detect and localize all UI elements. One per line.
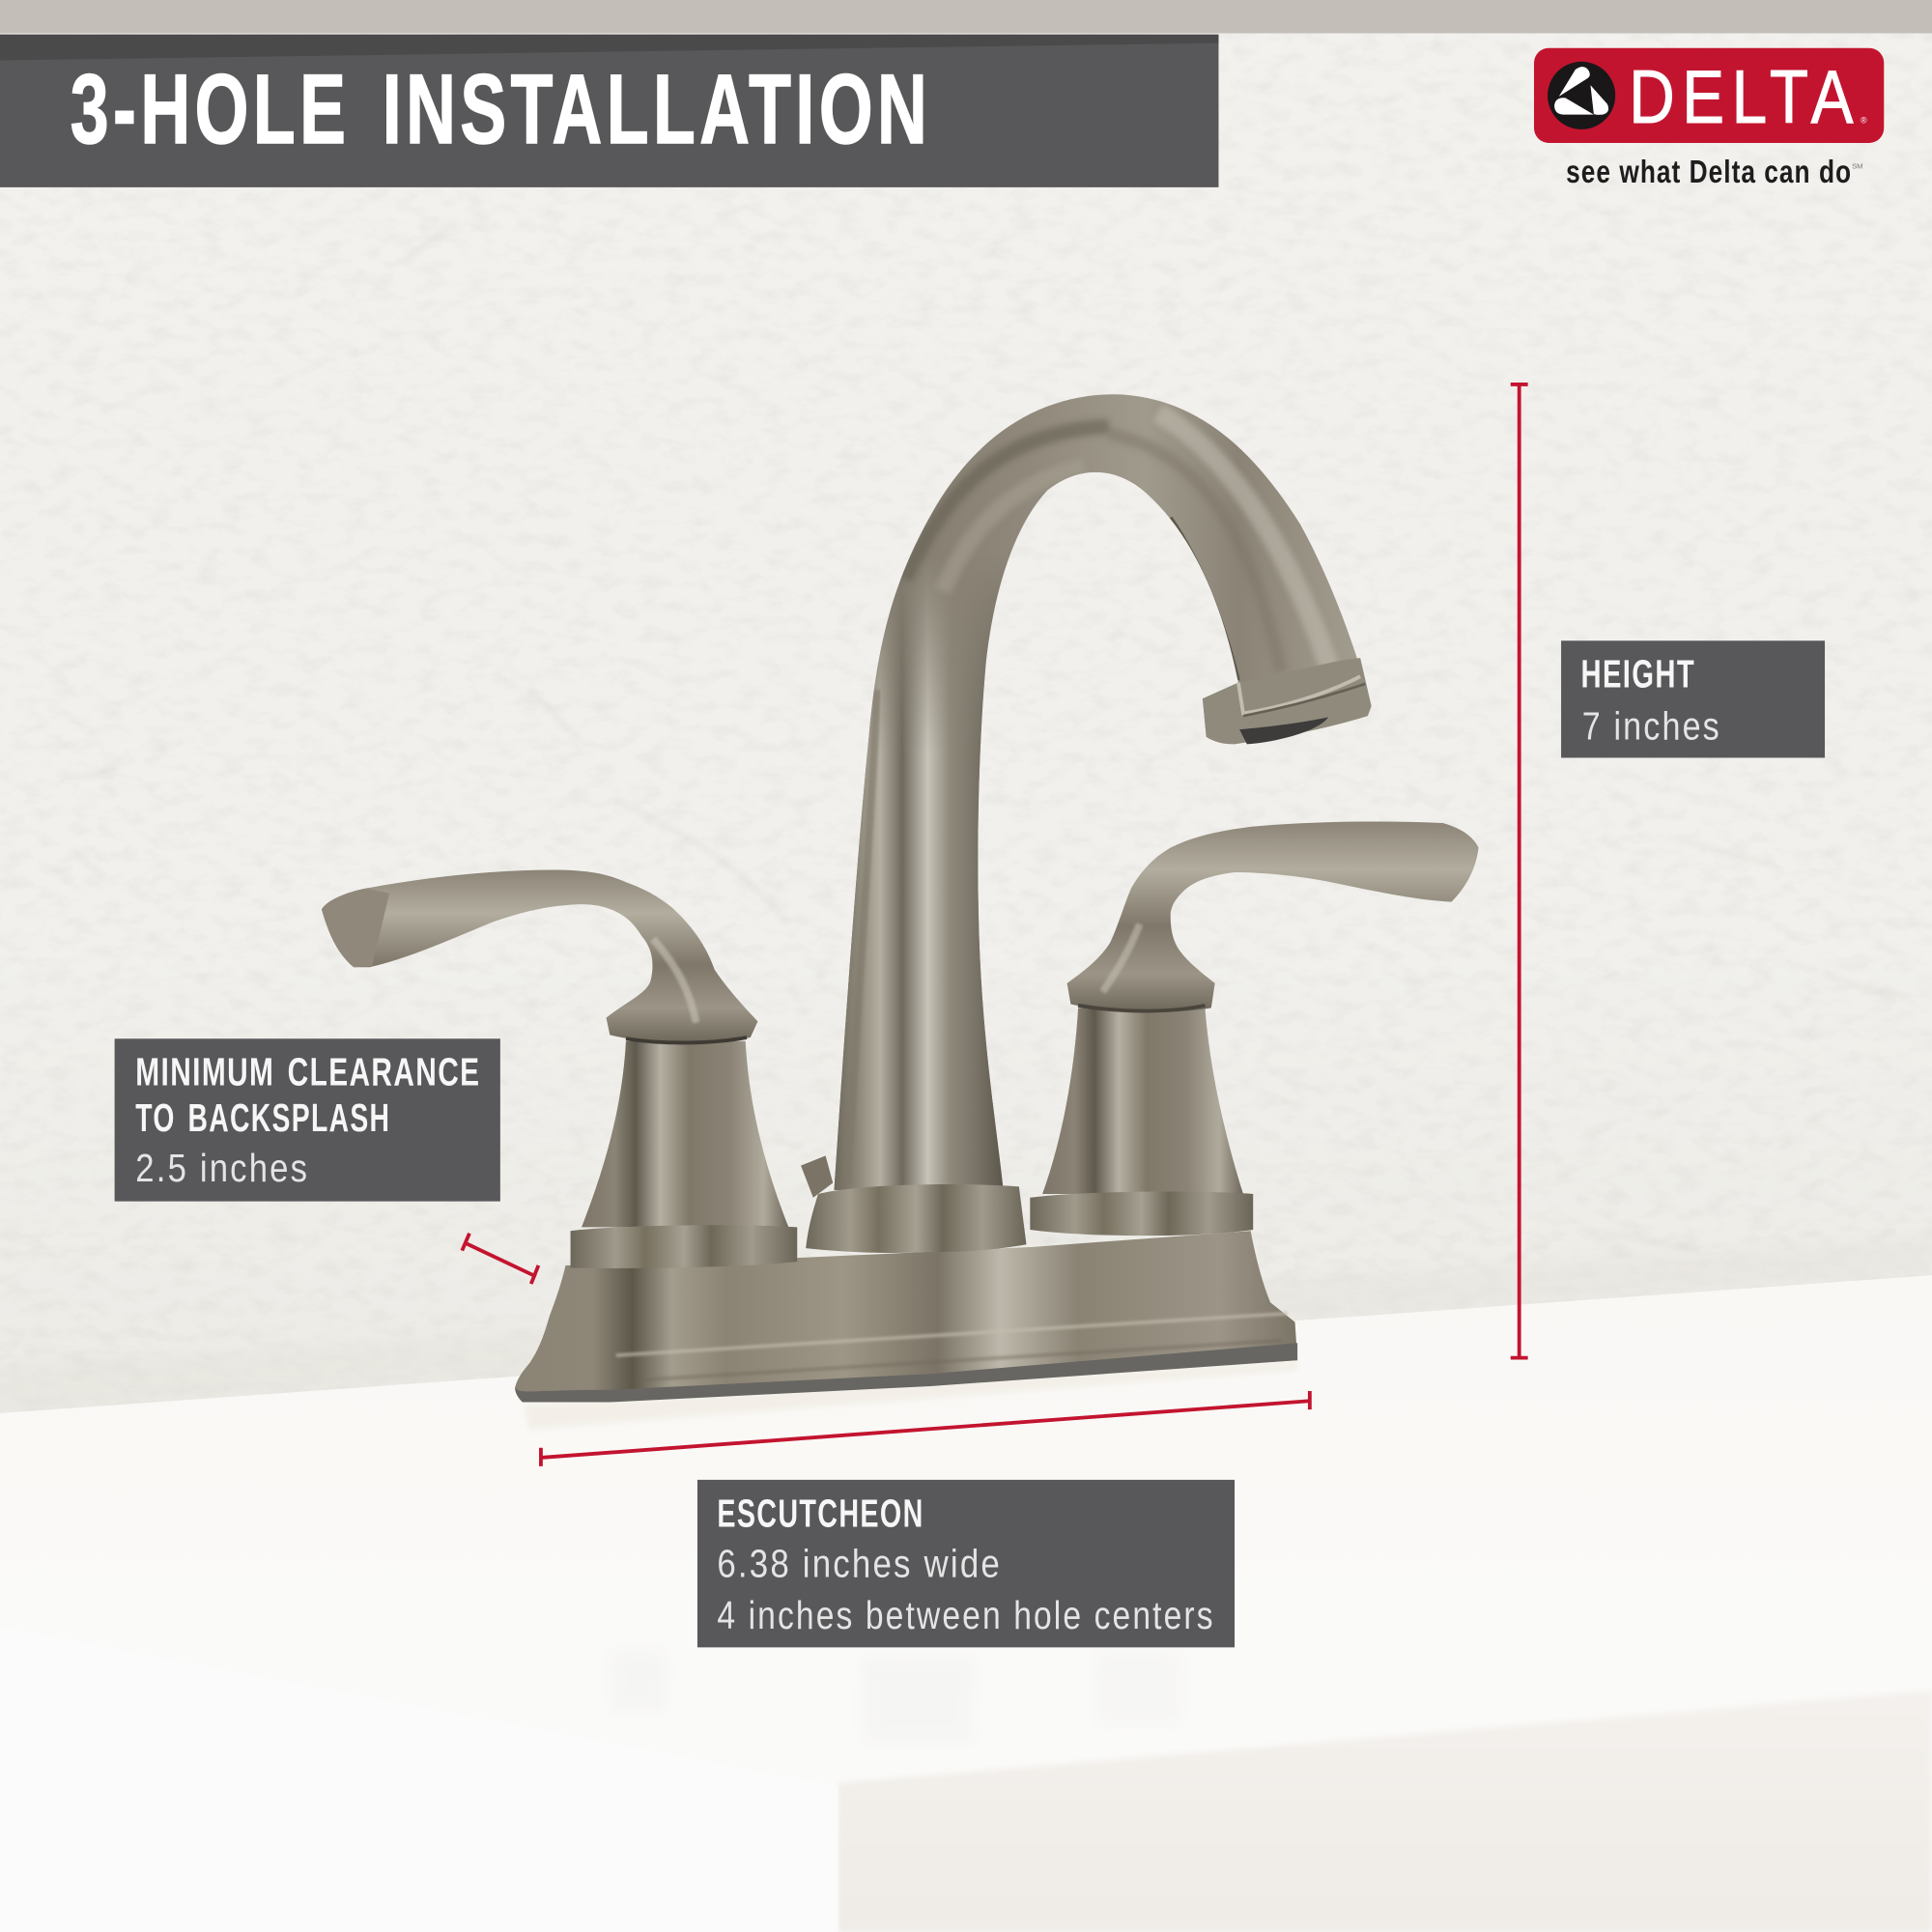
callout: escutcheon [697,1480,1235,1647]
callout: height: HEIGHT [1580,652,1695,696]
right handle [1030,821,1479,1236]
callout: minimum clearance: MINIMUM CLEARANCE [135,1050,480,1094]
callout: escutcheon: 4 inches between hole centers [717,1593,1215,1637]
escutcheon [515,1231,1297,1403]
tagline: see what Delta can do [1566,155,1852,190]
left handle [322,870,797,1268]
callout: minimum clearance: TO BACKSPLASH [135,1095,390,1140]
ceiling strip [0,0,1932,33]
counter and basin [0,1275,1932,1932]
faucet [322,370,1479,1403]
callout: height: 7 inches [1582,703,1721,748]
height dimension line [1511,384,1528,1359]
service mark: SM [1852,162,1863,171]
logo: Delta [1534,48,1884,190]
callout: minimum clearance: 2.5 inches [135,1146,309,1190]
callout: minimum clearance [115,1038,500,1202]
callout: escutcheon: 6.38 inches wide [717,1542,1002,1586]
wordmark: DELTA [1629,56,1861,139]
background: plaster wall [0,0,1932,1430]
callout: height [1561,640,1825,757]
clearance dimension line [462,1234,538,1284]
escutcheon dimension line [541,1391,1310,1466]
spout [835,394,1372,1190]
spout base collar [806,1184,1026,1253]
registered mark: ® [1861,116,1867,126]
rear lift rod [801,1155,833,1198]
icon: Delta triangle emblem [1548,62,1615,129]
title bar [0,35,1218,187]
callout: escutcheon: ESCUTCHEON [717,1491,924,1535]
spout nozzle [1203,658,1372,744]
title: 3-HOLE INSTALLATION [71,54,931,164]
